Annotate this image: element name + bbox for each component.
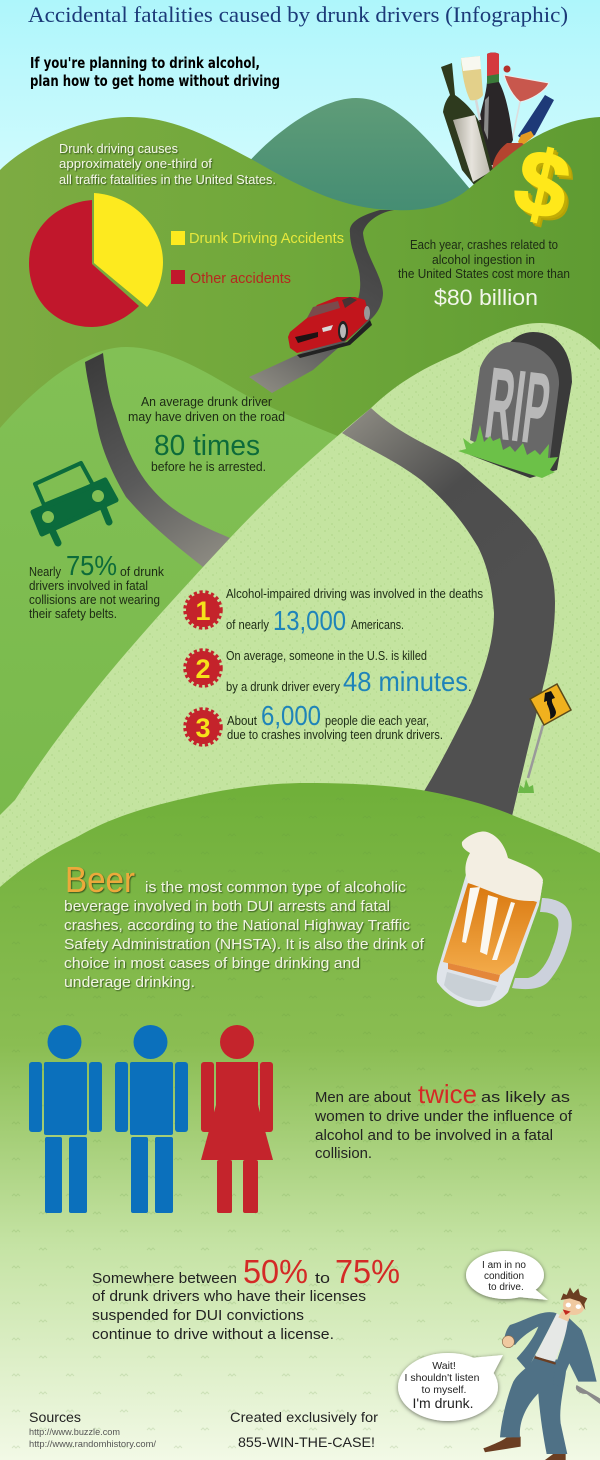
callout: I shouldn't listen to myself: Wait!: [432, 1360, 456, 1372]
text: cost of crashes: [398, 237, 570, 310]
subtitle: plan how to get home without driving: [30, 72, 280, 90]
text: beer paragraph: crashes, according to the National Highway Traffic: [64, 917, 411, 934]
hill: left light green: [0, 347, 340, 900]
text: 75 percent seat belts: of drunk: [120, 564, 164, 579]
text: statistic two: [226, 648, 472, 697]
text: men twice as likely: [314, 1079, 573, 1162]
text: statistic one: of nearly: [226, 617, 269, 632]
callout: I shouldn't listen to myself: I'm drunk.: [412, 1395, 474, 1411]
text: one-third of fatalities: approximately one-third of: [59, 156, 212, 171]
text: men twice as likely: Men are about: [315, 1089, 412, 1106]
text: beer paragraph: underage drinking.: [64, 974, 195, 991]
text: statistic three: [227, 700, 443, 742]
icon: green wine bottle: [441, 63, 493, 186]
icon: martini glass: [504, 66, 549, 140]
text: suspended licenses: suspended for DUI convictions: [92, 1307, 304, 1324]
icon: dollar sign: $: [506, 129, 578, 240]
callout: I shouldn't listen to myself: [398, 1353, 503, 1421]
icon: curve road sign: [518, 684, 571, 793]
text: suspended licenses: of drunk drivers who have their licenses: [92, 1288, 366, 1305]
text: statistic two: by a drunk driver every: [226, 679, 340, 694]
text: credit: Created exclusively for: [230, 1409, 378, 1425]
text: cost of crashes: alcohol ingestion in: [432, 252, 535, 267]
text: beer paragraph: is the most common type of alcoholic: [145, 879, 407, 896]
legend: drunk driving accidents: Drunk Driving Accidents: [189, 230, 344, 247]
text: suspended licenses: 50%: [243, 1253, 308, 1290]
text: suspended licenses: [92, 1253, 400, 1343]
callout: I am in no condition: condition: [484, 1271, 524, 1282]
pie chart: [29, 193, 163, 327]
text: statistic two: On average, someone in the U.S. is killed: [226, 648, 427, 663]
text: beer paragraph: choice in most cases of binge drinking and: [64, 955, 360, 972]
text: cost of crashes: the United States cost more than: [398, 266, 570, 281]
text: men twice as likely: women to drive under the influence of: [314, 1108, 573, 1125]
icon: blue bottle: [492, 95, 554, 180]
text: credit: [230, 1409, 378, 1450]
text: sources: http://www.randomhistory.com/: [29, 1439, 157, 1449]
icon: bottles and glasses: [441, 52, 554, 186]
illustration: drunk man: [483, 1287, 600, 1460]
text: 80 times: before he is arrested.: [151, 459, 266, 474]
subtitle: [30, 54, 280, 90]
subtitle: If you're planning to drink alcohol,: [30, 54, 260, 72]
text: 75 percent seat belts: Nearly: [29, 564, 61, 579]
icon: red car: [288, 297, 372, 358]
text: beer paragraph: beverage involved in both DUI arrests and fatal: [64, 898, 390, 915]
badge: number 3: [185, 709, 221, 745]
text: statistic three: About: [227, 713, 257, 728]
icon: red wine bottle: [479, 52, 513, 165]
icon: beer mug: [437, 832, 572, 1007]
icon: grass: [458, 425, 558, 478]
text: sources: http://www.buzzle.com: [29, 1427, 120, 1437]
icon: man 1: [29, 1025, 102, 1213]
callout: I am in no condition: to drive.: [488, 1282, 524, 1293]
icon: dollar sign: $: [508, 131, 581, 242]
text: statistic three: 6,000: [261, 700, 321, 731]
text: beer paragraph: [64, 859, 425, 991]
text: 75 percent seat belts: [29, 550, 164, 621]
text: statistic one: [226, 586, 483, 636]
road: large foreground road: [342, 408, 555, 825]
sky background: [0, 0, 600, 300]
text: 80 times: [128, 394, 285, 474]
text: 75 percent seat belts: their safety belts.: [29, 606, 117, 621]
road: left curving road: [85, 353, 230, 567]
icon: champagne glass: [461, 56, 483, 120]
callout: I shouldn't listen to myself: I shouldn't listen: [405, 1372, 480, 1384]
teal background hill: [240, 98, 475, 235]
text: sources: [29, 1409, 157, 1449]
text: 80 times: may have driven on the road: [128, 409, 285, 424]
legend: other accidents: Other accidents: [190, 270, 291, 287]
road: upper winding road: [249, 210, 394, 393]
hill: upper green band: [0, 117, 600, 470]
badge: number 1: 1: [195, 596, 211, 626]
badge: number 2: 2: [195, 654, 211, 684]
icon: woman: [201, 1025, 273, 1213]
text: statistic one: Americans.: [351, 617, 404, 632]
text: beer paragraph: Beer: [65, 859, 135, 900]
badge: number 1: [185, 592, 221, 628]
text: one-third of fatalities: [59, 141, 276, 187]
text: 75 percent seat belts: drivers involved in fatal: [29, 578, 148, 593]
text: suspended licenses: 75%: [335, 1253, 400, 1290]
callout: I am in no condition: I am in no: [482, 1260, 526, 1271]
icon: green car front view: [33, 463, 116, 543]
callout: I am in no condition: [466, 1251, 548, 1300]
text: suspended licenses: Somewhere between: [92, 1270, 237, 1287]
text: statistic one: 13,000: [273, 605, 346, 636]
text: statistic three: people die each year,: [325, 713, 429, 728]
text: men twice as likely: alcohol and to be involved in a fatal: [315, 1127, 553, 1144]
text: one-third of fatalities: all traffic fatalities in the United States.: [59, 172, 276, 187]
text: men twice as likely: twice: [418, 1079, 477, 1109]
text: 75 percent seat belts: collisions are not wearing: [29, 592, 160, 607]
text: one-third of fatalities: Drunk driving causes: [59, 141, 178, 156]
badge: number 3: 3: [195, 713, 211, 743]
callout: I shouldn't listen to myself: to myself.: [422, 1384, 466, 1396]
badge: number 2: [185, 650, 221, 686]
text: cost of crashes: $80 billion: [434, 285, 538, 310]
text: 80 times: An average drunk driver: [141, 394, 273, 409]
icon: dollar sign: $: [510, 133, 583, 244]
text: 75 percent seat belts: 75%: [66, 550, 117, 581]
text: statistic two: 48 minutes: [343, 666, 468, 697]
text: 80 times: 80 times: [154, 430, 260, 462]
text: statistic one: Alcohol-impaired driving was involved in the deaths: [226, 586, 483, 601]
text: cost of crashes: Each year, crashes related to: [410, 237, 558, 252]
hill: front green gradient: [0, 783, 600, 1460]
text: men twice as likely: as likely as: [481, 1089, 570, 1106]
hill: large pale green: [0, 323, 600, 900]
icon: RIP gravestone: [458, 332, 572, 478]
text: statistic three: due to crashes involving teen drunk drivers.: [227, 727, 443, 742]
text: sources: Sources: [29, 1409, 81, 1425]
text: men twice as likely: collision.: [315, 1145, 372, 1162]
text: credit: 855-WIN-THE-CASE!: [238, 1434, 375, 1450]
text: suspended licenses: to: [315, 1270, 330, 1287]
text: statistic two: .: [468, 679, 472, 694]
icon: man 2: [115, 1025, 188, 1213]
title: Accidental fatalities caused by drunk drivers (Infographic): [28, 2, 568, 27]
text: suspended licenses: continue to drive without a license.: [92, 1326, 334, 1343]
icon: two men and one woman: [29, 1025, 273, 1213]
text: beer paragraph: Safety Administration (NHSTA). It is also the drink of: [64, 936, 425, 953]
